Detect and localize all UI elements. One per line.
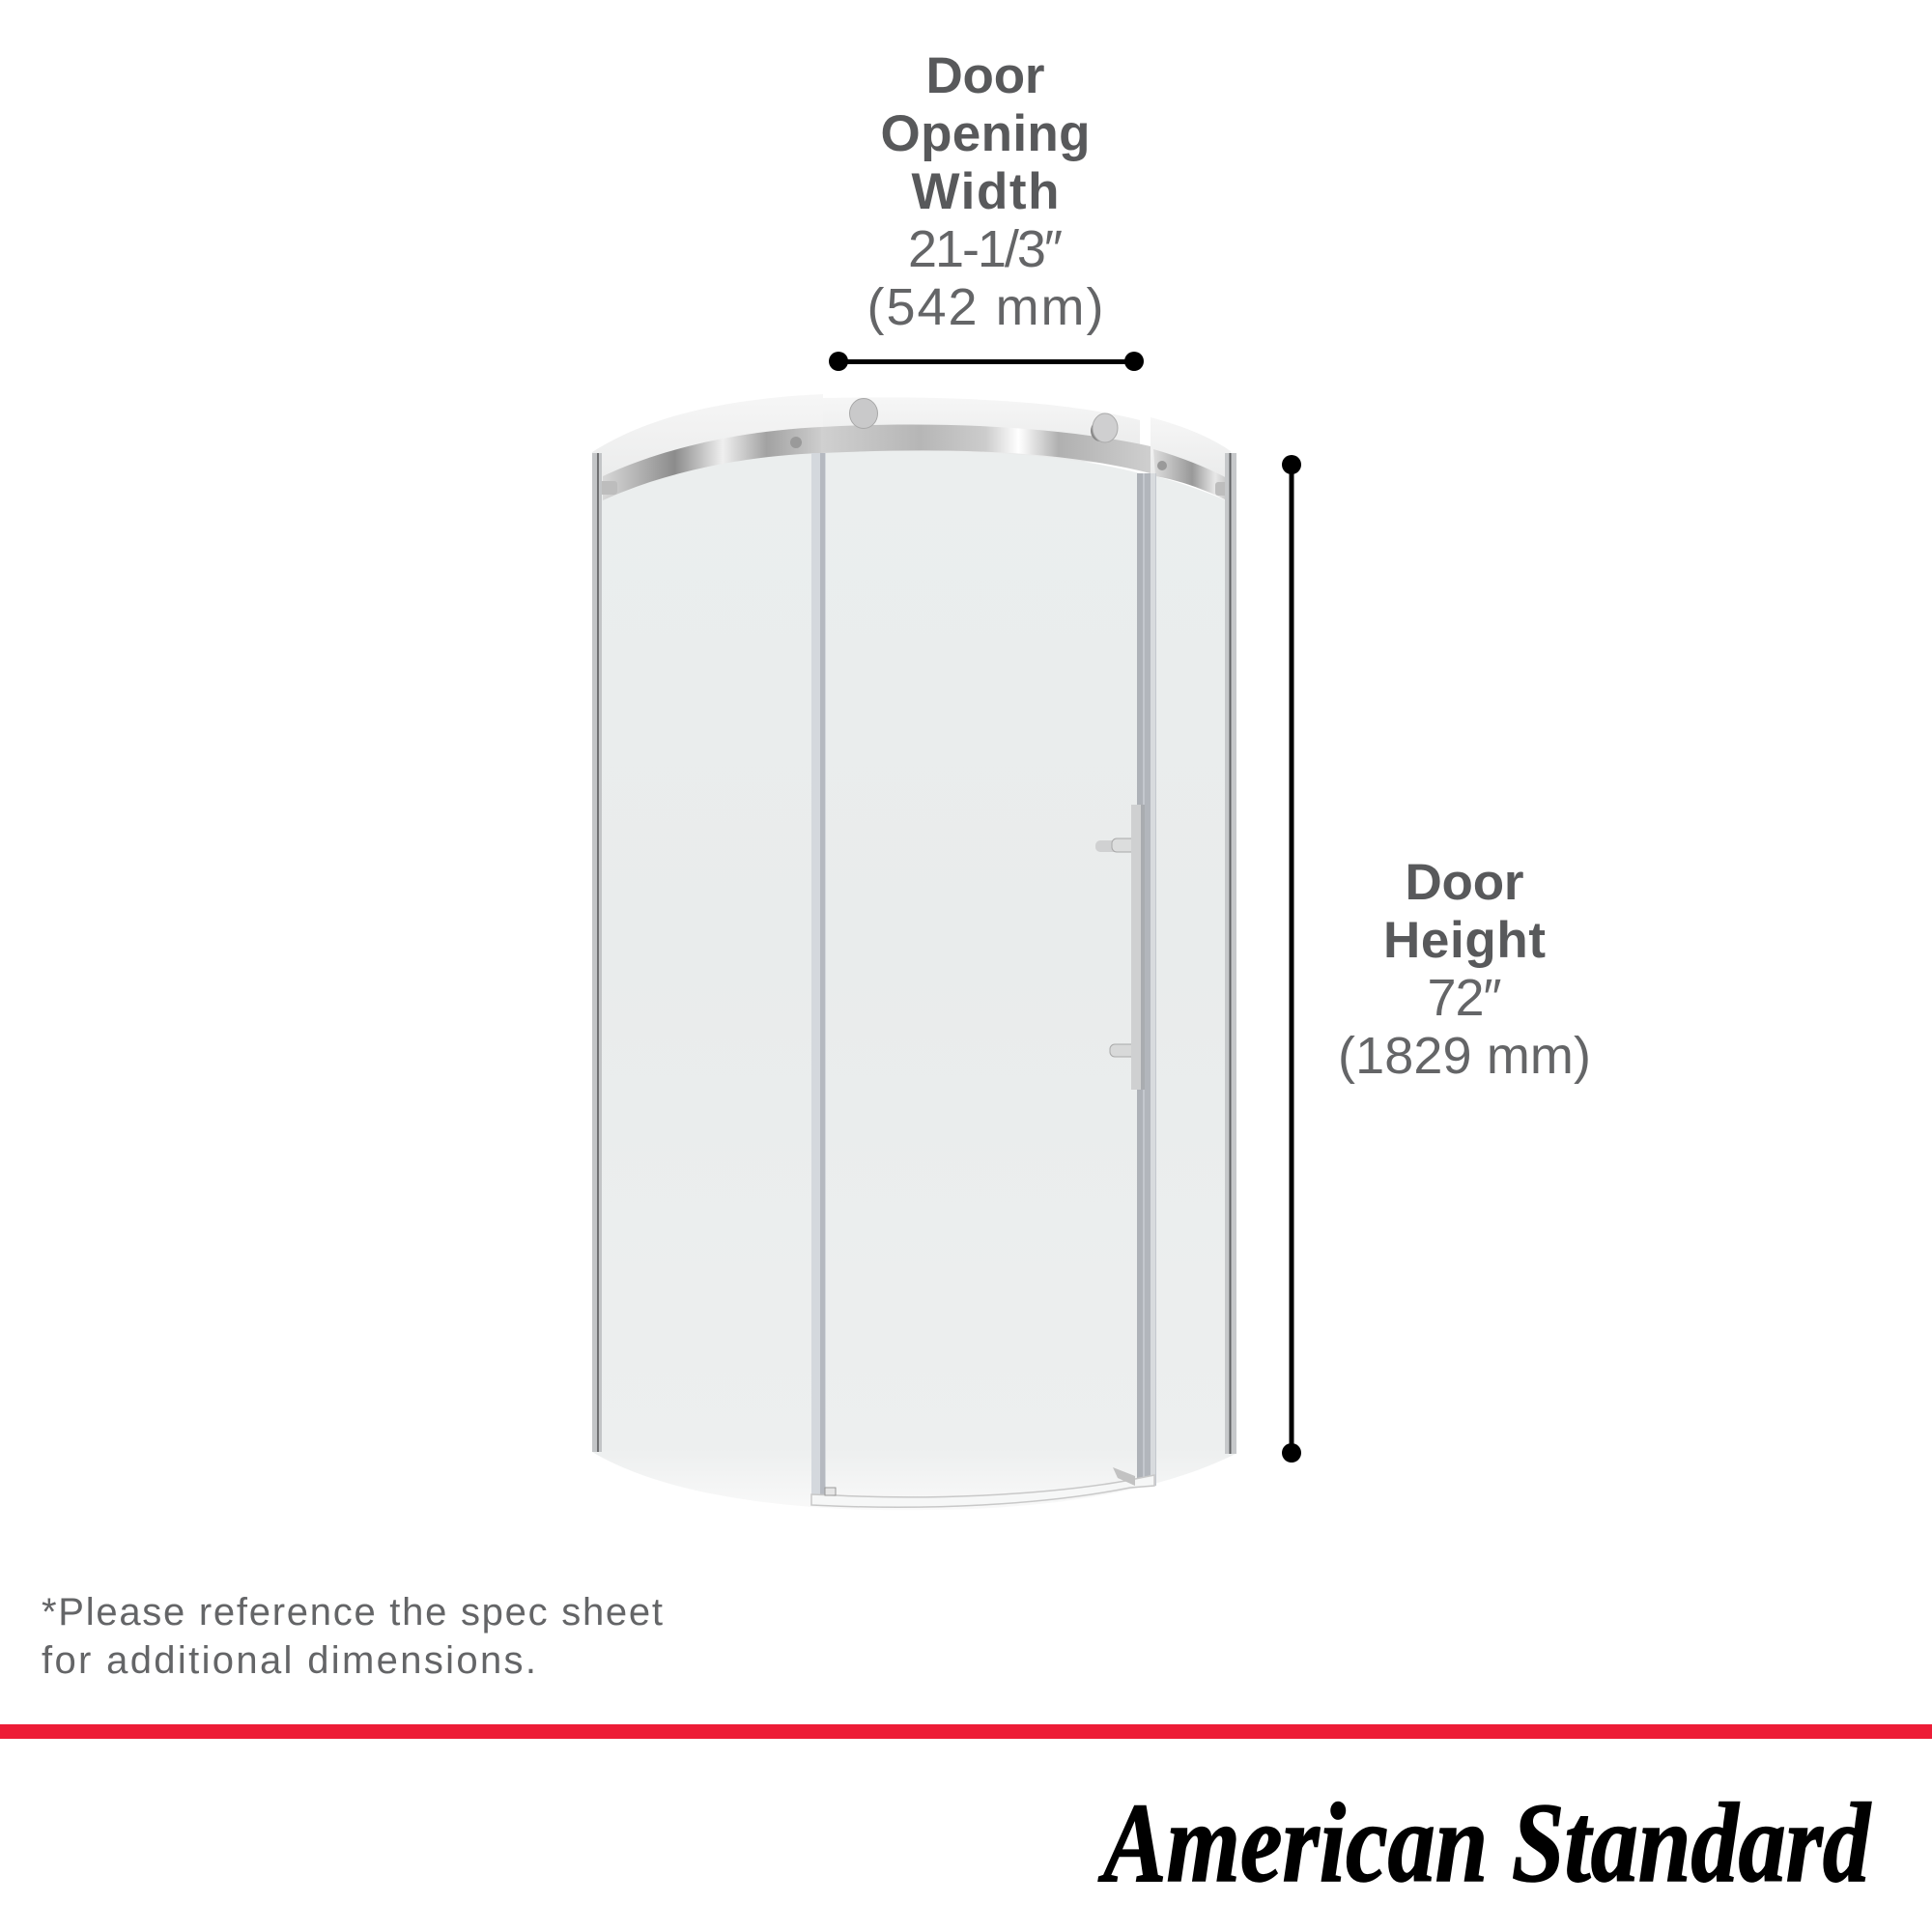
heading: door opening width: (542 mm) xyxy=(867,278,1103,336)
bottom door track xyxy=(811,1475,1154,1507)
shower door illustration xyxy=(592,394,1236,1510)
door roller left xyxy=(850,398,877,429)
footnote: for additional dimensions. xyxy=(42,1639,536,1682)
heading: door height: 72″ xyxy=(1428,969,1501,1027)
heading: door opening width xyxy=(867,47,1103,336)
dimension line: width xyxy=(829,352,1144,371)
dimension line: height xyxy=(1282,455,1301,1463)
glass upper band xyxy=(592,394,1231,502)
heading: door height: Height xyxy=(1383,912,1546,969)
top rail: right xyxy=(1153,449,1231,502)
heading: door opening width: Door xyxy=(925,47,1045,104)
heading: door height xyxy=(1338,854,1591,1085)
door right stile xyxy=(1137,473,1156,1486)
footnote: *Please reference the spec sheet xyxy=(42,1591,663,1634)
door roller right xyxy=(1091,413,1118,442)
heading: door opening width: Opening xyxy=(881,105,1090,162)
top rail: centre xyxy=(821,424,1151,473)
red divider bar xyxy=(0,1724,1932,1739)
rail bolts xyxy=(598,437,1236,496)
door handle xyxy=(1095,805,1145,1090)
glass lower band xyxy=(592,1449,1236,1510)
heading: door height: (1829 mm) xyxy=(1338,1027,1591,1085)
right wall profile xyxy=(1225,453,1236,1454)
heading: door opening width: Width xyxy=(912,163,1059,220)
heading: door height: Door xyxy=(1405,854,1524,911)
glass body xyxy=(592,451,1231,1454)
heading: door opening width: 21-1/3″ xyxy=(908,220,1063,278)
top rail: left xyxy=(603,427,821,500)
door left stile xyxy=(811,453,826,1495)
left wall profile xyxy=(592,453,602,1452)
track end stop xyxy=(825,1467,1135,1495)
footnote xyxy=(42,1591,663,1682)
